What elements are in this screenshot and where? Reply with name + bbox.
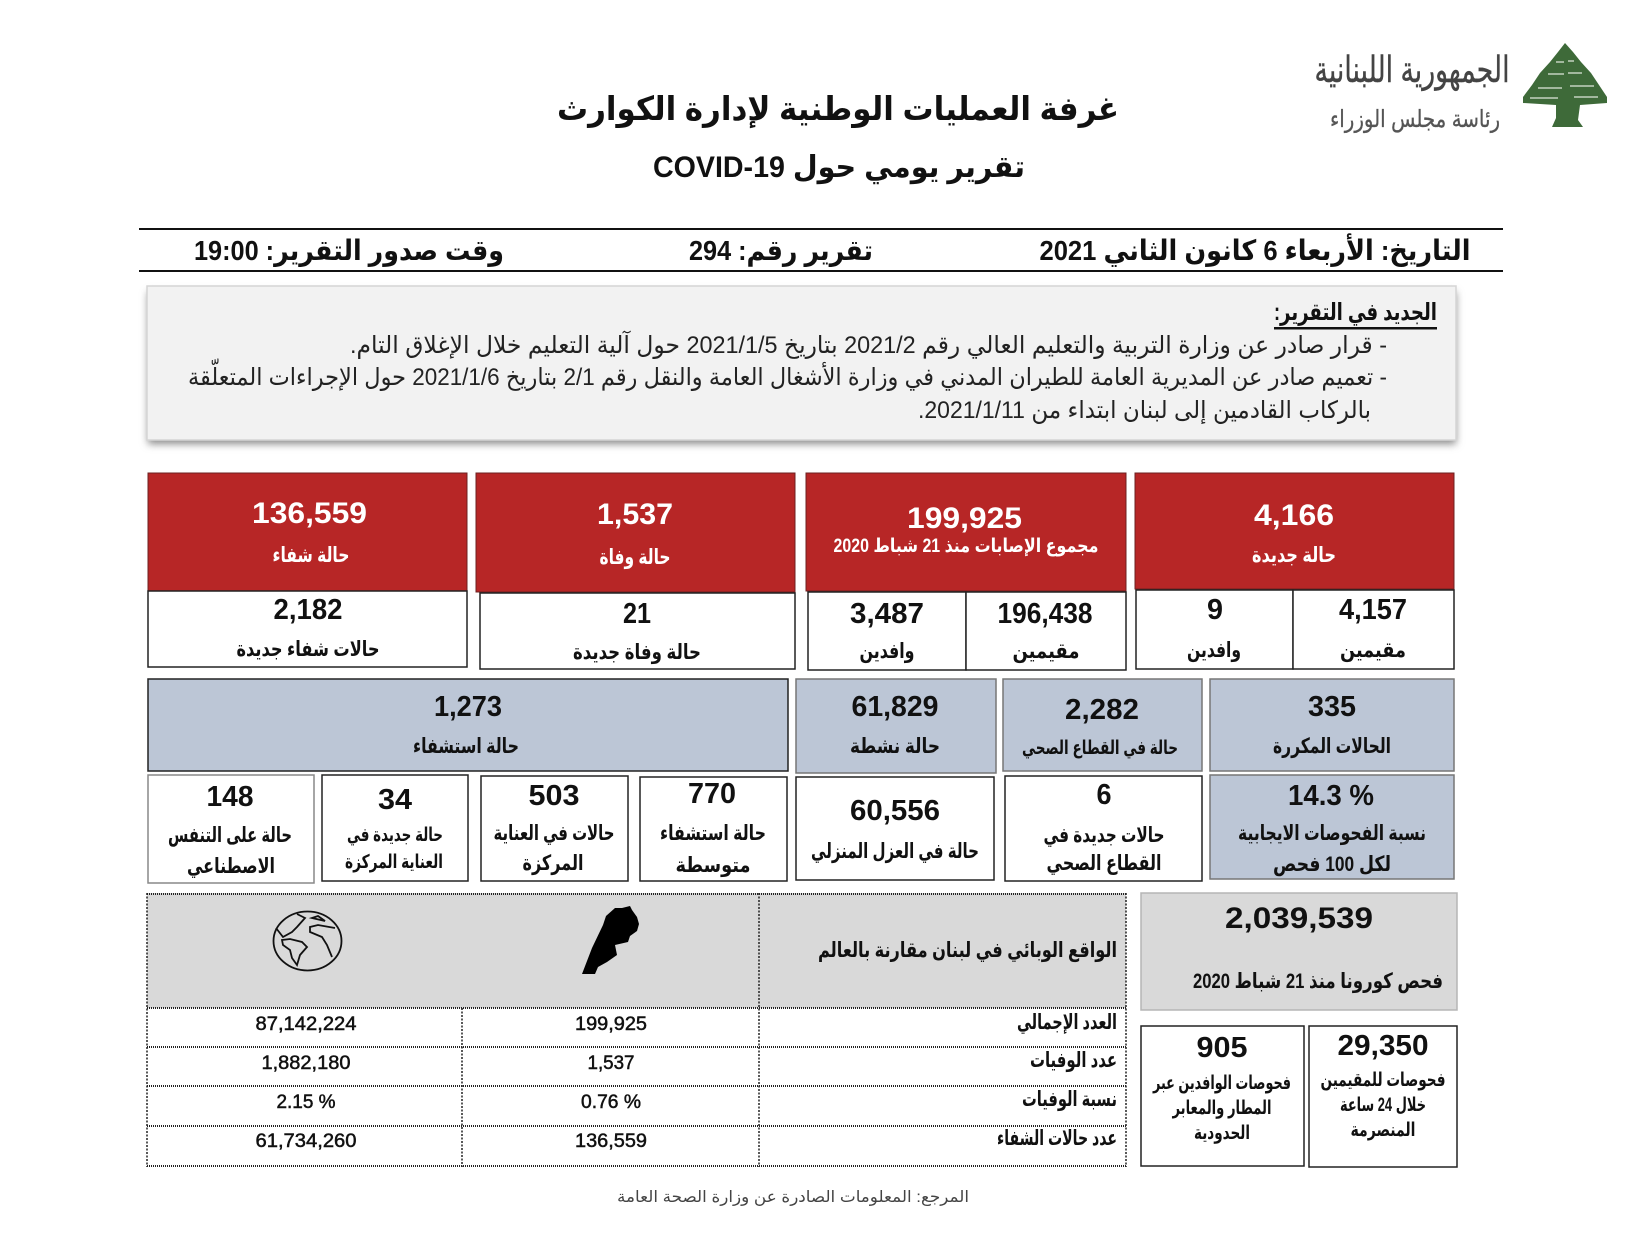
logo: Lebanese cedar and presidency of council of ministers	[1314, 43, 1607, 133]
blue card: active	[796, 679, 996, 773]
panel: comparison table Lebanon vs world	[147, 893, 1126, 1167]
white card: ICU: حالات في العناية	[494, 822, 614, 845]
blue card: repeated cases	[1210, 679, 1454, 771]
white card: arrivals	[1136, 590, 1293, 669]
white card: new deaths: حالة وفاة جديدة	[573, 641, 701, 664]
white card: arrivals	[808, 592, 966, 670]
blue card: healthcare sector: 2,282	[1065, 694, 1139, 726]
panel: deaths	[476, 473, 795, 669]
red card: recovered total: حالة شفاء	[272, 544, 350, 567]
table heading: الواقع الوبائي في لبنان مقارنة بالعالم	[818, 939, 1117, 962]
white card: residents: مقيمين	[1340, 639, 1406, 662]
white card: arrivals: 9	[1207, 594, 1223, 626]
panel: new cases	[1135, 473, 1454, 669]
white card: resident tests: خلال 24 ساعة	[1340, 1095, 1426, 1116]
white card: moderate: حالة استشفاء	[660, 822, 766, 845]
white card: moderate	[640, 777, 787, 881]
red card: total infections: مجموع الإصابات منذ 21 شباط 2020	[834, 536, 1098, 557]
white card: arrivals: وافدين	[1187, 639, 1241, 662]
blue card: positivity rate: نسبة الفحوصات الايجابية	[1238, 822, 1426, 845]
row: death rate: 2.15 %	[276, 1092, 336, 1113]
grey card: total tests	[1141, 893, 1457, 1010]
white card: arrivals tests: الحدودية	[1194, 1123, 1250, 1144]
source footnote: المرجع: المعلومات الصادرة عن وزارة الصحة العامة	[617, 1189, 969, 1207]
blue card: hospitalised: 1,273	[434, 691, 502, 723]
row: recoveries: 136,559	[575, 1131, 647, 1152]
blue card: repeated cases: 335	[1308, 691, 1356, 723]
date: التاريخ: الأربعاء 6 كانون الثاني 2021	[1040, 233, 1470, 267]
blue card: active: 61,829	[852, 691, 938, 723]
red card: new cases: حالة جديدة	[1252, 544, 1336, 567]
white card: arrivals tests: فحوصات الوافدين عبر	[1152, 1073, 1291, 1094]
white card: ICU	[481, 776, 628, 881]
panel: healthcare sector	[1003, 679, 1202, 881]
white card: new ICU	[322, 775, 468, 881]
white card: residents: مقيمين	[1012, 640, 1080, 663]
blue card: positivity rate: 14.3 %	[1288, 780, 1374, 812]
news line 3: بالركاب القادمين إلى لبنان ابتداء من 2021/1/11.	[918, 397, 1371, 425]
blue card: positivity rate: لكل 100 فحص	[1273, 853, 1391, 876]
icon: globe	[274, 912, 342, 970]
white card: arrivals: وافدين	[860, 640, 914, 663]
row: deaths: عدد الوفيات	[1030, 1049, 1117, 1072]
white card: new recovered: 2,182	[274, 594, 342, 626]
white card: arrivals: 3,487	[850, 598, 924, 630]
row: total: 87,142,224	[256, 1014, 357, 1035]
row: death rate	[276, 1088, 1117, 1113]
panel: active cases	[796, 679, 996, 880]
white card: residents: 196,438	[998, 598, 1092, 630]
red card: new cases	[1135, 473, 1454, 589]
news heading: الجديد في التقرير:	[1274, 299, 1437, 326]
white card: new healthcare cases	[1005, 776, 1202, 881]
white card: ICU: 503	[528, 780, 580, 812]
white card: new healthcare cases: 6	[1096, 779, 1112, 811]
grey card: total tests: فحص كورونا منذ 21 شباط 2020	[1193, 970, 1443, 993]
white card: ventilated: حالة على التنفس	[168, 824, 292, 847]
row: total: العدد الإجمالي	[1017, 1011, 1117, 1034]
blue card: healthcare sector: حالة في القطاع الصحي	[1022, 738, 1178, 759]
white card: new recovered	[148, 591, 467, 667]
white card: ventilated: الاصطناعي	[187, 855, 275, 878]
title: غرفة العمليات الوطنية لإدارة الكوارث	[557, 90, 1119, 129]
blue card: repeated cases: الحالات المكررة	[1273, 735, 1391, 758]
row: deaths: 1,882,180	[262, 1053, 350, 1074]
white card: arrivals tests	[1141, 1026, 1304, 1166]
white card: new ICU: 34	[378, 784, 412, 816]
panel: recovered	[148, 473, 467, 667]
white card: arrivals tests: المطار والمعابر	[1172, 1098, 1272, 1119]
white card: new deaths: 21	[623, 598, 651, 630]
logo text: republic: الجمهورية اللبنانية	[1314, 49, 1510, 91]
red card: deaths total: 1,537	[597, 498, 673, 531]
row: recoveries: 61,734,260	[256, 1131, 356, 1152]
white card: moderate: 770	[688, 778, 736, 810]
red card: recovered total: 136,559	[252, 497, 367, 530]
white card: ventilated	[148, 775, 314, 883]
white card: new ICU: العناية المركزة	[345, 852, 443, 873]
blue card: healthcare sector	[1003, 679, 1202, 771]
row: deaths	[262, 1049, 1117, 1074]
row: recoveries: عدد حالات الشفاء	[997, 1127, 1117, 1150]
blue card: hospitalised	[148, 679, 788, 771]
white card: home isolation: حالة في العزل المنزلي	[811, 840, 979, 863]
panel: repeated and positivity	[1210, 679, 1454, 879]
white card: ventilated: 148	[206, 781, 254, 813]
white card: resident tests: فحوصات للمقيمين	[1320, 1070, 1446, 1091]
panel: total infections	[806, 473, 1126, 670]
blue card: positivity rate	[1210, 775, 1454, 879]
report number: تقرير رقم: 294	[689, 235, 873, 267]
red card: total infections	[806, 473, 1126, 591]
red card: deaths total	[476, 473, 795, 592]
blue card: active: حالة نشطة	[850, 735, 940, 758]
row: death rate: 0.76 %	[581, 1092, 641, 1113]
news line 2: - تعميم صادر عن المديرية العامة للطيران المدني في وزارة الأشغال العامة والنقل رقم 2/1 بتاريخ 2021/1/6 حول الإجراءات المتعلّقة	[188, 359, 1387, 391]
red card: deaths total: حالة وفاة	[600, 546, 670, 569]
row: total: 199,925	[575, 1014, 647, 1035]
white card: residents	[966, 592, 1126, 670]
white card: resident tests: المنصرمة	[1350, 1120, 1416, 1141]
white card: new ICU: حالة جديدة في	[347, 825, 443, 846]
white card: new deaths	[480, 593, 795, 669]
red card: recovered total	[148, 473, 467, 591]
logo text: presidency: رئاسة مجلس الوزراء	[1330, 106, 1500, 133]
icon: cedar tree	[1523, 43, 1607, 127]
panel: hospitalised	[148, 679, 788, 883]
white card: new healthcare cases: حالات جديدة في	[1044, 824, 1164, 847]
panel: news in report	[147, 286, 1456, 444]
white card: residents	[1293, 590, 1454, 669]
row: total	[256, 1011, 1117, 1035]
grey card: total tests: 2,039,539	[1225, 902, 1373, 935]
blue card: hospitalised: حالة استشفاء	[413, 735, 519, 758]
white card: home isolation	[796, 777, 994, 880]
white card: residents: 4,157	[1339, 594, 1407, 626]
row: deaths: 1,537	[588, 1053, 634, 1074]
white card: new healthcare cases: القطاع الصحي	[1046, 852, 1162, 875]
row: death rate: نسبة الوفيات	[1022, 1088, 1117, 1111]
white card: new recovered: حالات شفاء جديدة	[236, 638, 380, 661]
white card: arrivals tests: 905	[1196, 1032, 1248, 1064]
report info bar	[139, 228, 1503, 272]
white card: moderate: متوسطة	[676, 854, 750, 877]
white card: resident tests	[1309, 1026, 1457, 1167]
white card: home isolation: 60,556	[850, 795, 940, 827]
white card: resident tests: 29,350	[1338, 1030, 1428, 1062]
white card: ICU: المركزة	[522, 852, 584, 875]
subtitle: تقرير يومي حول COVID-19	[653, 151, 1025, 185]
news line 1: - قرار صادر عن وزارة التربية والتعليم العالي رقم 2021/2 بتاريخ 2021/1/5 حول آلية التعليم خلال الإغلاق التام.	[350, 330, 1387, 359]
red card: new cases: 4,166	[1254, 499, 1334, 532]
row: recoveries	[256, 1127, 1117, 1152]
panel: tests	[1141, 893, 1457, 1167]
red card: total infections: 199,925	[907, 502, 1022, 535]
icon: Lebanon map	[582, 906, 639, 974]
report time: وقت صدور التقرير: 19:00	[194, 235, 504, 267]
